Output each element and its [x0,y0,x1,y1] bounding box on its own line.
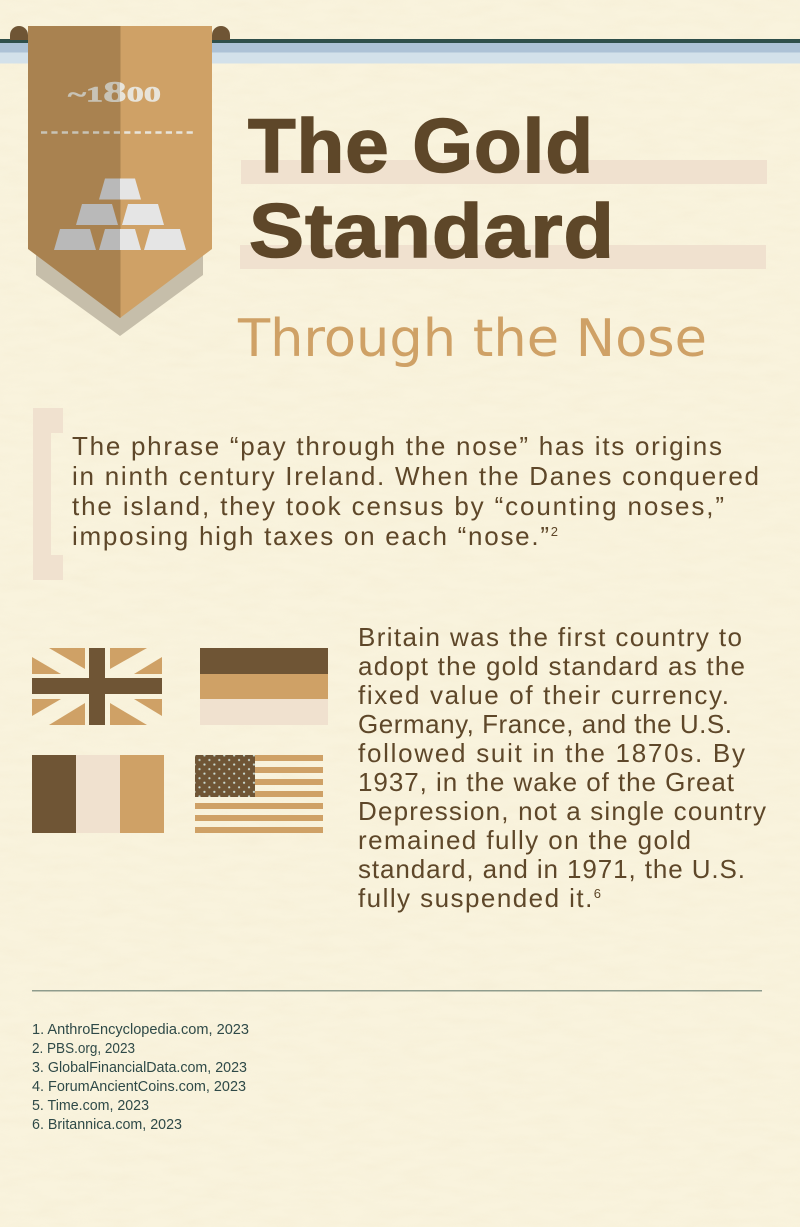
banner roll ends [10,26,230,40]
intro paragraph: 2 [551,524,558,539]
title: The Gold [248,104,594,189]
banner right half [120,26,212,318]
history paragraph: Britain was the first country to [358,622,742,652]
bracket [33,408,63,580]
footer rule [32,990,762,992]
history paragraph: fully suspended it. [358,883,592,913]
title: Standard [249,189,615,274]
history paragraph: adopt the gold standard as the [358,651,745,681]
intro paragraph [72,431,759,551]
sources list: 6. Britannica.com, 2023 [32,1116,182,1133]
sources list: 5. Time.com, 2023 [32,1097,149,1114]
flag: France [32,755,164,833]
history paragraph: 1937, in the wake of the Great [358,767,735,797]
banner with gold bars [10,26,230,336]
sources list: 2. PBS.org, 2023 [32,1040,135,1057]
top stripes [0,39,800,64]
flag: United States [195,755,323,833]
history paragraph: 6 [594,886,601,901]
intro paragraph: the island, they took census by “counting noses,” [72,491,724,521]
intro paragraph: imposing high taxes on each “nose.” [72,521,549,551]
history paragraph: Germany, France, and the U.S. [358,709,732,739]
history paragraph: standard, and in 1971, the U.S. [358,854,745,884]
subtitle: Through the Nose [237,309,707,369]
icon: gold bars [54,178,186,250]
flag: Germany [200,648,328,725]
history paragraph [358,622,766,913]
flags [32,648,328,833]
banner shadow [36,250,203,336]
sources list: 3. GlobalFinancialData.com, 2023 [32,1059,247,1076]
sources list: 1. AnthroEncyclopedia.com, 2023 [32,1021,249,1038]
history paragraph: Depression, not a single country [358,796,766,826]
history paragraph: fixed value of their currency. [358,680,729,710]
flag: Britain [32,648,162,725]
banner left half [28,26,120,318]
title [240,104,767,274]
intro paragraph: The phrase “pay through the nose” has its origins [72,431,722,461]
intro paragraph: in ninth century Ireland. When the Danes conquered [72,461,759,491]
history paragraph: followed suit in the 1870s. By [358,738,745,768]
sources list [32,1021,249,1133]
year label: ~1 8 00 [68,76,161,108]
sources list: 4. ForumAncientCoins.com, 2023 [32,1078,246,1095]
dashed rule [41,131,193,134]
history paragraph: remained fully on the gold [358,825,691,855]
title highlight bars [240,160,767,269]
